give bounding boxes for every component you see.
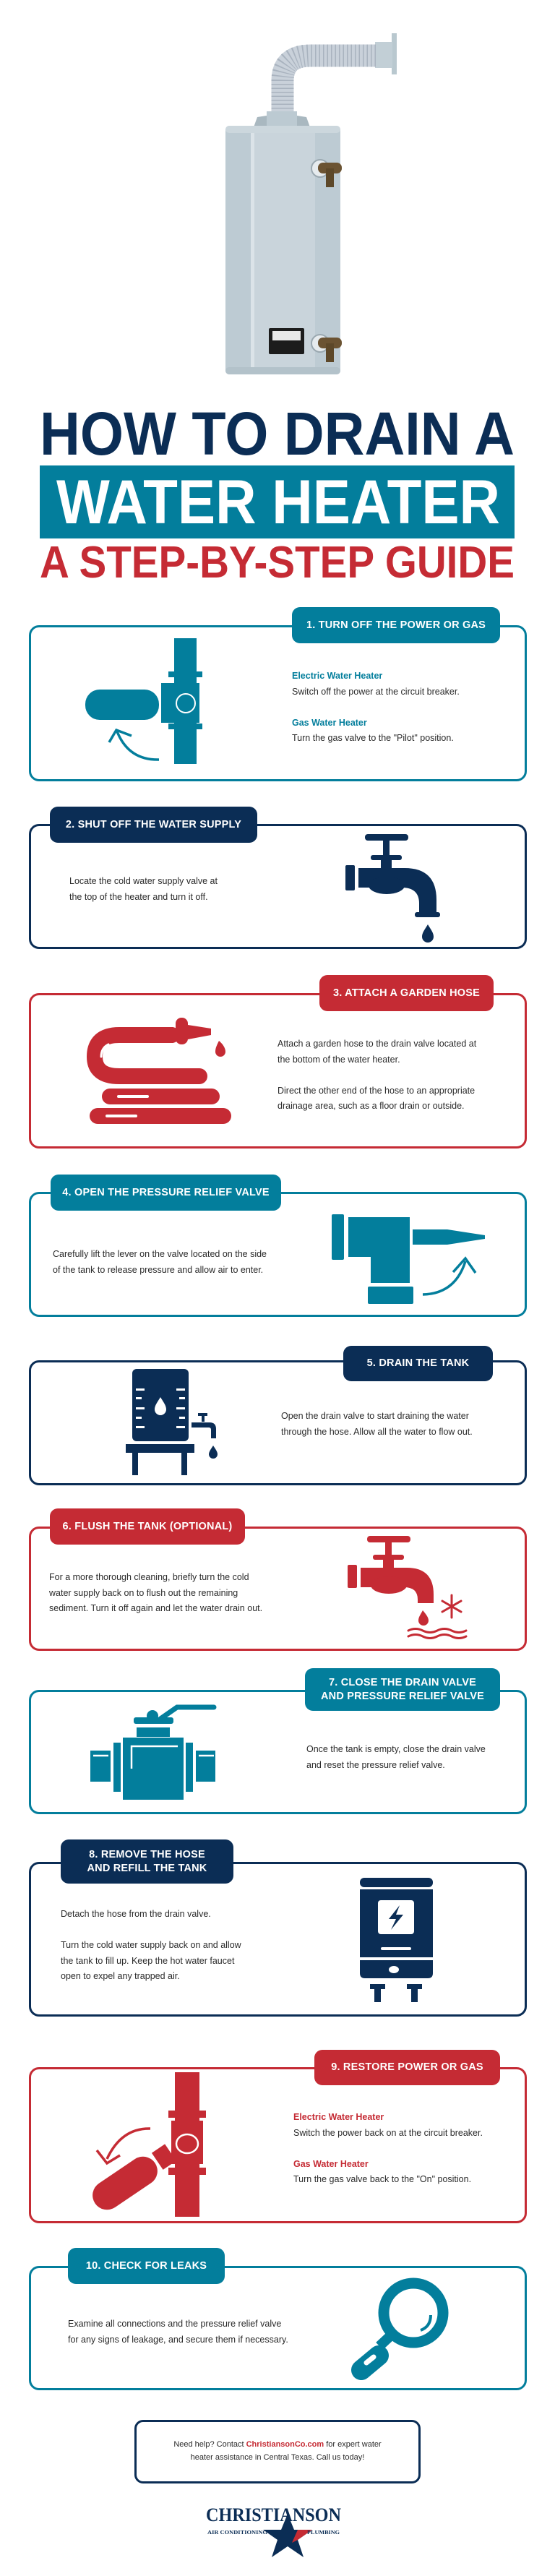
text: step 5: Open the drain valve to start draining the water: [281, 1411, 469, 1421]
text: step 1: Gas Water Heater: [292, 717, 367, 727]
icon: gas valve off (step 1): [85, 638, 202, 764]
footer callout: [134, 2420, 421, 2483]
tab: step 1: 1. TURN OFF THE POWER OR GAS: [306, 619, 486, 630]
panel: step 6: [29, 1527, 527, 1651]
icon: faucet (step 2): [345, 834, 440, 943]
text: step 6: sediment. Turn it off again and let the water drain out.: [49, 1603, 262, 1613]
tab: step 9: [314, 2050, 500, 2085]
logo: [206, 2504, 341, 2557]
text: step 10: [68, 2319, 288, 2345]
text: step 2: the top of the heater and turn it off.: [69, 892, 208, 902]
text: step 1: Turn the gas valve to the "Pilot" position.: [292, 733, 454, 743]
text: step 9: Electric Water Heater: [293, 2112, 384, 2122]
hero: water heater illustration: [225, 33, 397, 374]
text: step 10: Examine all connections and the pressure relief valve: [68, 2319, 281, 2329]
panel: step 5: [29, 1360, 527, 1485]
tab: step 7: AND PRESSURE RELIEF VALVE: [321, 1690, 484, 1701]
icon: faucet with cold water (step 6): [348, 1536, 466, 1638]
tab: step 2: [50, 807, 257, 843]
logo: AIR CONDITIONING: [207, 2530, 268, 2536]
text: step 3: the bottom of the water heater.: [278, 1054, 400, 1064]
icon: ball valve (step 7): [90, 1707, 215, 1800]
panel: step 2: [29, 824, 527, 949]
text: step 1: Switch off the power at the circuit breaker.: [292, 687, 460, 697]
tab: step 3: 3. ATTACH A GARDEN HOSE: [333, 987, 480, 999]
tab: step 4: [51, 1175, 281, 1211]
text: step 2: Locate the cold water supply valve at: [69, 876, 218, 886]
icon: electric water heater (step 8): [360, 1878, 433, 2002]
tab: step 10: [68, 2248, 225, 2284]
text: step 4: Carefully lift the lever on the valve located on the side: [53, 1249, 267, 1259]
text: step 1: Electric Water Heater: [292, 671, 382, 681]
panel: step 8: [29, 1862, 527, 2017]
text: step 8: Turn the cold water supply back on and allow: [61, 1940, 241, 1950]
title: HOW TO DRAIN A: [40, 400, 515, 468]
logo: PLUMBING: [307, 2530, 340, 2536]
title: WATER HEATER: [56, 468, 500, 537]
text: step 3: drainage area, such as a floor drain or outside.: [278, 1101, 464, 1111]
text: step 1: [292, 671, 460, 743]
tab: step 10: 10. CHECK FOR LEAKS: [86, 2259, 207, 2271]
text: step 6: For a more thorough cleaning, briefly turn the cold: [49, 1572, 249, 1582]
text: step 4: [53, 1249, 267, 1275]
logo: CHRISTIANSON: [206, 2504, 341, 2525]
text: step 3: [278, 1039, 477, 1111]
tab: step 5: [343, 1346, 493, 1381]
tab: step 3: [319, 975, 494, 1011]
tab: step 8: AND REFILL THE TANK: [87, 1862, 207, 1873]
panel: step 9: [29, 2067, 527, 2223]
tab: step 8: 8. REMOVE THE HOSE: [89, 1849, 205, 1860]
text: step 5: through the hose. Allow all the water to flow out.: [281, 1427, 473, 1437]
text: step 3: Direct the other end of the hose to an appropriate: [278, 1086, 475, 1096]
tab: step 5: 5. DRAIN THE TANK: [367, 1357, 469, 1369]
text: step 9: Switch the power back on at the circuit breaker.: [293, 2128, 483, 2138]
text: step 4: of the tank to release pressure and allow air to enter.: [53, 1265, 263, 1275]
text: step 8: open to expel any trapped air.: [61, 1971, 180, 1981]
tab: step 9: 9. RESTORE POWER OR GAS: [331, 2061, 483, 2073]
icon: draining tank (step 5): [126, 1369, 218, 1475]
panel: step 3: [29, 993, 527, 1149]
panel: step 4: [29, 1192, 527, 1317]
text: step 7: Once the tank is empty, close the drain valve: [306, 1744, 486, 1754]
text: step 7: and reset the pressure relief valve.: [306, 1759, 445, 1769]
tab: step 7: [305, 1668, 500, 1711]
icon: magnifying glass (step 10): [361, 2283, 443, 2370]
text: step 9: Turn the gas valve back to the "On" position.: [293, 2174, 471, 2184]
panel: step 10: [29, 2266, 527, 2390]
icon: gas valve on (step 9): [87, 2072, 206, 2217]
text: step 8: the tank to fill up. Keep the hot water faucet: [61, 1956, 234, 1966]
tab: step 1: [292, 607, 500, 643]
text: step 6: [49, 1572, 262, 1613]
title: A STEP-BY-STEP GUIDE: [40, 538, 515, 588]
text: step 7: [306, 1744, 486, 1769]
text: step 9: Gas Water Heater: [293, 2158, 369, 2168]
panel: step 7: [29, 1690, 527, 1814]
icon: pressure relief valve (step 4): [332, 1214, 485, 1304]
tab: step 2: 2. SHUT OFF THE WATER SUPPLY: [66, 818, 241, 830]
text: step 6: water supply back on to flush out the remaining: [49, 1587, 238, 1597]
text: step 8: [61, 1909, 241, 1981]
icon: garden hose (step 3): [90, 1018, 231, 1124]
text: step 8: Detach the hose from the drain valve.: [61, 1909, 211, 1919]
tab: step 4: 4. OPEN THE PRESSURE RELIEF VALVE: [62, 1187, 270, 1198]
tab: step 6: 6. FLUSH THE TANK (OPTIONAL): [63, 1521, 232, 1532]
text: step 2: [69, 876, 218, 902]
tab: step 8: [61, 1839, 233, 1884]
text: step 5: [281, 1411, 473, 1437]
text: step 9: [293, 2112, 483, 2184]
panel: step 1: [29, 625, 527, 781]
text: step 10: for any signs of leakage, and secure them if necessary.: [68, 2335, 288, 2345]
footer callout: heater assistance in Central Texas. Call us today!: [191, 2453, 364, 2462]
text: step 3: Attach a garden hose to the drain valve located at: [278, 1039, 476, 1049]
tab: step 6: [50, 1508, 245, 1545]
title: [40, 400, 515, 588]
tab: step 7: 7. CLOSE THE DRAIN VALVE: [329, 1677, 476, 1688]
footer callout: Need help? Contact ChristiansonCo.com for expert water: [173, 2440, 382, 2449]
